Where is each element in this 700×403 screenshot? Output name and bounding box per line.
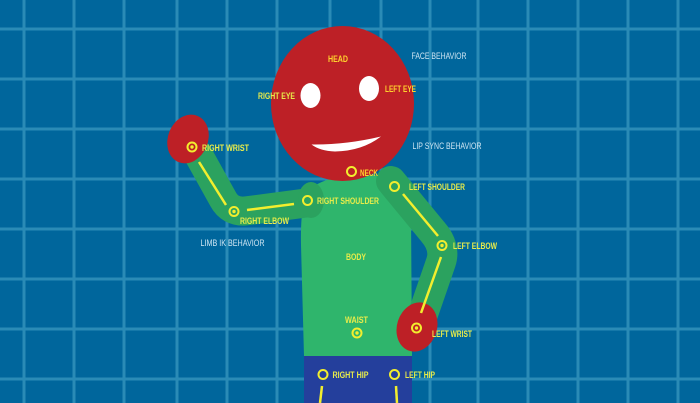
- right hand: [160, 108, 216, 170]
- left arm: [390, 181, 444, 357]
- labels: WAIST: [345, 315, 368, 326]
- labels: LIP SYNC BEHAVIOR: [412, 141, 482, 152]
- bones: [199, 162, 441, 403]
- labels: LEFT WRIST: [432, 329, 472, 340]
- left hand: [390, 297, 444, 357]
- labels: [200, 51, 497, 381]
- labels: HEAD: [328, 54, 348, 65]
- right arm: [160, 108, 324, 218]
- icon: mouth: [312, 136, 381, 152]
- pelvis: [304, 356, 412, 403]
- labels: LEFT EYE: [385, 84, 416, 95]
- labels: RIGHT WRIST: [202, 143, 249, 154]
- labels: LEFT HIP: [405, 370, 435, 381]
- labels: LEFT SHOULDER: [409, 182, 465, 193]
- labels: FACE BEHAVIOR: [412, 51, 467, 62]
- labels: RIGHT HIP: [332, 370, 369, 381]
- labels: RIGHT SHOULDER: [317, 196, 379, 207]
- icon: right eye: [300, 83, 320, 108]
- joint centers: [190, 145, 444, 335]
- labels: NECK: [360, 168, 378, 179]
- labels: LEFT ELBOW: [453, 241, 497, 252]
- right shoulder cap: [298, 182, 324, 218]
- labels: LIMB IK BEHAVIOR: [200, 238, 265, 249]
- labels: RIGHT ELBOW: [240, 216, 289, 227]
- labels: RIGHT EYE: [258, 91, 295, 102]
- body: [301, 175, 412, 356]
- icon: left eye: [359, 76, 379, 101]
- labels: BODY: [346, 252, 366, 263]
- head: [271, 26, 414, 181]
- joints: [188, 142, 446, 379]
